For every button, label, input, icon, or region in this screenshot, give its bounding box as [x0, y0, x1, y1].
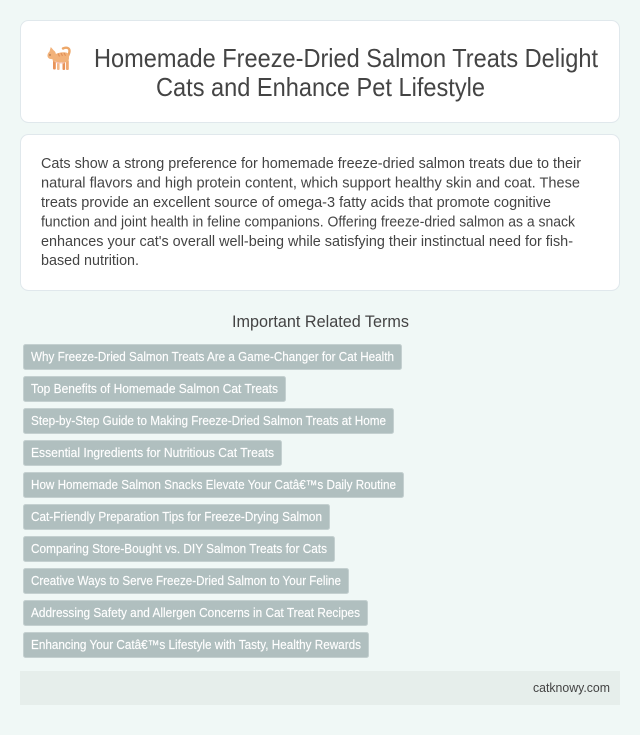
text block: description: Cats show a strong preference for homemade freeze-dried salmon treats due to their [41, 155, 581, 172]
list: related term tags [24, 344, 404, 658]
tag 8 [24, 568, 348, 594]
panel: title header [20, 20, 620, 122]
title: Cats and Enhance Pet Lifestyle [156, 72, 485, 102]
footer [20, 671, 620, 705]
tag 4 [24, 440, 282, 466]
text block: description: based nutrition. [41, 252, 139, 269]
text block: description: natural flavors and high protein content, which support healthy skin and coat. These [41, 174, 580, 192]
icon: cat [47, 47, 70, 70]
footer: catknowy.com [533, 681, 610, 695]
tag 4: Essential Ingredients for Nutritious Cat Treats [31, 446, 274, 460]
tag 1 [24, 344, 402, 370]
text block: description: treats provide an excellent source of omega-3 fatty acids that promote cognitive [41, 194, 551, 211]
tag 6 [24, 504, 330, 530]
tag 8: Creative Ways to Serve Freeze-Dried Salmon to Your Feline [31, 574, 341, 588]
tag 10: Enhancing Your Catâ€™s Lifestyle with Tasty, Healthy Rewards [31, 638, 361, 652]
text block: description: enhances your cat's overall well-being while satisfying their instinctual need for fish- [41, 233, 573, 250]
title: Homemade Freeze-Dried Salmon Treats Delight [94, 43, 599, 73]
tag 7: Comparing Store-Bought vs. DIY Salmon Treats for Cats [31, 542, 327, 556]
tag 2: Top Benefits of Homemade Salmon Cat Treats [31, 382, 278, 396]
tag 3: Step-by-Step Guide to Making Freeze-Dried Salmon Treats at Home [31, 414, 386, 428]
tag 5 [24, 472, 404, 498]
tag 10 [24, 632, 368, 658]
tag 1: Why Freeze-Dried Salmon Treats Are a Game-Changer for Cat Health [31, 350, 394, 364]
tag 6: Cat-Friendly Preparation Tips for Freeze-Drying Salmon [31, 510, 322, 524]
tag 5: How Homemade Salmon Snacks Elevate Your Catâ€™s Daily Routine [31, 478, 396, 492]
panel: description [20, 134, 620, 290]
tag 3 [24, 408, 394, 434]
tag 9: Addressing Safety and Allergen Concerns in Cat Treat Recipes [31, 606, 360, 620]
tag 2 [24, 376, 286, 402]
title [94, 43, 599, 102]
tag 7 [24, 536, 334, 562]
text block: description [41, 155, 581, 269]
heading: related terms: Important Related Terms [232, 313, 409, 331]
tag 9 [24, 600, 368, 626]
text block: description: function and joint health in feline companions. Offering freeze-dried salmon as a snack [41, 214, 575, 230]
